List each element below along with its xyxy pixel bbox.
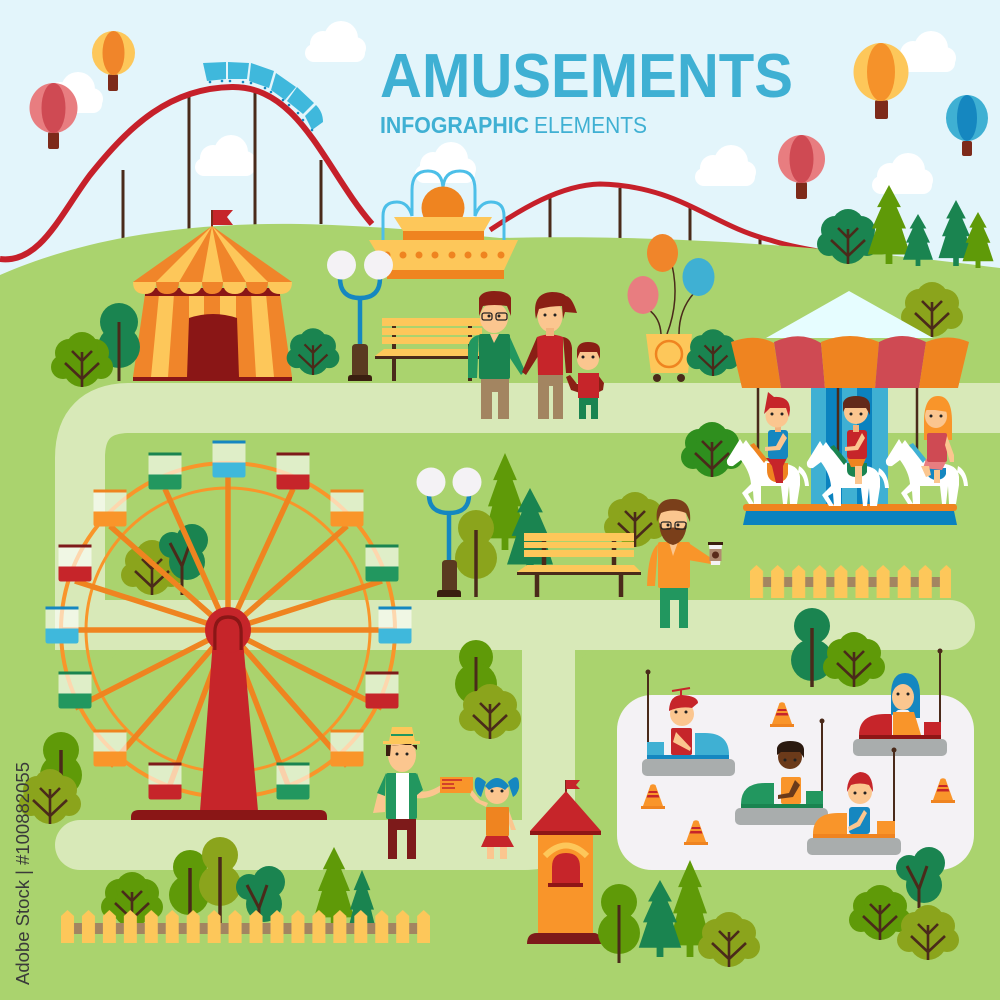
trees behind coaster [817,185,994,268]
stock credit: Adobe Stock | #100882055 [12,762,33,985]
left lawn tree [40,732,82,796]
bush in mid lawn [459,684,521,739]
coaster train [203,62,323,131]
hot air balloon: orange right [854,43,908,119]
wheel hub [205,607,251,653]
pines bottom [314,847,377,942]
olive tree bottom left [199,837,241,923]
bush bottom right 2 [897,905,959,960]
green lawn blocks [105,433,1000,1000]
hot air balloon: pink left [30,83,78,149]
wheel tower [200,640,258,811]
bumper car 1: blue [642,670,735,776]
ticket [440,777,473,793]
coffee cup [708,542,723,565]
street lamp 1 [327,250,393,381]
tree behind wheel [159,524,208,595]
bush bottom right 1 [849,885,911,940]
wheel spokes [62,477,395,798]
bush bottom left [101,872,163,927]
bush behind bench 2 [604,492,666,547]
bush behind carousel [901,282,963,337]
olive tree by lamp 2 [455,510,497,597]
bush left of carousel [681,422,743,477]
hot air balloon: pink right [778,135,825,199]
tree by tent [98,303,140,381]
bush left of tent [51,332,113,387]
dark tree bottom right [896,847,945,908]
vertical path connector [500,640,575,870]
ticket seller man [373,727,473,859]
son [566,342,604,419]
walkway paths [80,408,1000,845]
bush behind wheel [121,540,183,595]
circus tent [133,210,292,381]
green tree bottom left [169,850,209,915]
hot air balloon: blue right [946,95,988,156]
bush lower left [19,769,81,824]
bumper car 2: red [853,648,947,756]
tree above bumper arena [791,608,833,687]
bottom picket fence [61,910,430,943]
mother [522,292,577,419]
tent flag [212,210,233,227]
rider 3 [909,396,954,483]
hills ground [0,224,1000,1000]
bush by cart [687,329,739,376]
family [468,291,604,419]
wheel cabins [46,440,412,800]
tree bottom centre [598,884,640,963]
fountain [369,171,518,279]
man with coffee [647,499,723,628]
pine trees by lamp 2 [484,453,553,575]
dark tree bottom [236,866,285,927]
carousel [727,291,969,525]
bench 1 [375,318,483,381]
rider 1 [750,392,790,483]
carousel canopy [731,336,969,388]
pines bottom centre [639,860,711,957]
rider 2 [830,396,870,484]
bush bottom centre [698,912,760,967]
ticket booth tower [527,780,601,944]
carousel horses [727,439,968,506]
clouds [42,21,956,194]
bench 2 [517,533,641,597]
balloon cart [628,234,714,382]
subtitle: ELEMENTS [534,112,647,138]
hot air balloon: orange left [92,31,135,91]
roller coaster [0,62,945,266]
right picket fence [750,565,951,598]
bush above bumper arena [823,632,885,687]
ferris wheel [46,440,412,820]
cones [641,702,955,845]
title: AMUSEMENTS [380,42,793,111]
bumper car arena [617,695,974,870]
bush right of tent [287,328,339,375]
street lamp 2 [416,468,482,597]
girl with ticket [470,777,519,859]
tent body [133,288,292,381]
father [468,291,525,419]
bumper car 4: orange [807,748,901,855]
bumper car 3: green [735,718,828,825]
tent roof [133,226,292,294]
subtitle: INFOGRAPHIC [380,112,529,138]
tree in mid lawn [455,640,497,710]
